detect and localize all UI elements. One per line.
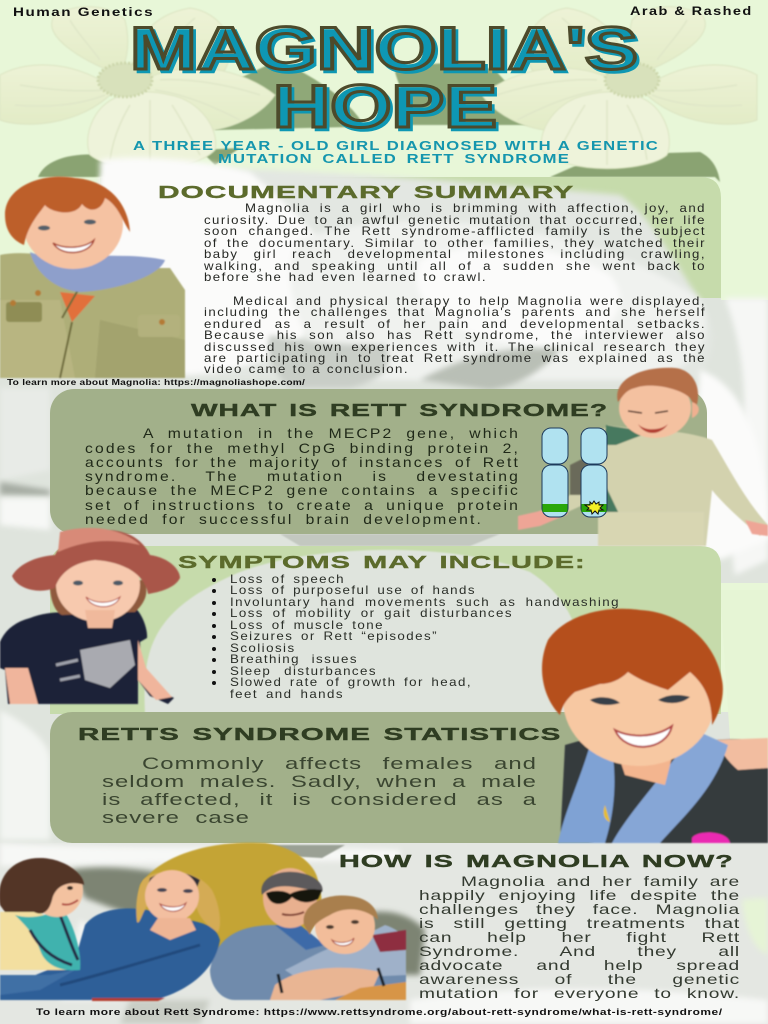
title: Magnolia's Hope: MAGNOLIA'S: [133, 18, 641, 85]
list: symptoms: Loss of purposeful use of hands: [230, 584, 476, 597]
list: symptoms: feet and hands: [230, 688, 344, 701]
panel: documentary summary background: [100, 177, 721, 300]
list: symptoms: Involuntary hand movements such as handwashing: [230, 596, 620, 609]
title: Magnolia's Hope: MAGNOLIA'S: [130, 15, 638, 82]
text: documentary summary: Medical and physical therapy to help Magnolia were displayed,: [233, 294, 706, 308]
text: what is Rett syndrome: set of instructions to create a unique protein: [85, 497, 520, 513]
subtitle: MUTATION CALLED RETT SYNDROME: [218, 152, 570, 166]
text: documentary summary: endured as a result of her pain and developmental setbacks.: [204, 317, 706, 331]
list: symptoms: [212, 573, 620, 701]
text: documentary summary: of the documentary. Similar to other families, they watched their: [204, 236, 706, 250]
list: symptoms: Slowed rate of growth for head,: [230, 676, 472, 689]
text: what is Rett syndrome: because the MECP2 gene contains a specific: [85, 482, 520, 498]
text: documentary summary: walking, and speaking until all of a sudden she went back to: [204, 259, 706, 273]
text: statistics: seldom males. Sadly, when a male: [102, 773, 537, 791]
text: documentary summary: curiosity. Due to an awful genetic mutation that occurred, her life: [204, 213, 706, 227]
heading: statistics: RETTS SYNDROME STATISTICS: [78, 724, 561, 744]
photo: laughing girl in cream sweater: [518, 368, 768, 546]
subtitle: [133, 139, 659, 166]
photo: smiling child in green jacket: [0, 177, 185, 378]
panel: what is rett syndrome background: [50, 389, 707, 534]
text: how is Magnolia now: mutation for everyone to know.: [419, 985, 740, 1001]
text: documentary summary: Magnolia is a girl who is brimming with affection, joy, and: [245, 201, 706, 215]
text: documentary summary: including the challenges that Magnolia's parents and she herself: [204, 305, 706, 319]
text: how is Magnolia now: can help her fight Rett: [419, 929, 740, 945]
text: how is Magnolia now: awareness of the genetic: [419, 971, 740, 987]
text: how is Magnolia now: Magnolia and her family are: [461, 873, 740, 889]
yellow paint circle behind family: [139, 843, 322, 960]
text: statistics: is affected, it is considered as a: [102, 791, 537, 809]
text: what is Rett syndrome: codes for the methyl CpG binding protein 2,: [85, 440, 520, 456]
panel: symptoms background: [50, 546, 721, 714]
text: how is Magnolia now: is still getting treatments that: [419, 915, 740, 931]
subtitle: A THREE YEAR - OLD GIRL DIAGNOSED WITH A GENETIC: [133, 139, 659, 153]
photo: smiling red-haired child with blue scarf: [542, 609, 768, 843]
text: what is Rett syndrome: A mutation in the MECP2 gene, which: [143, 425, 520, 441]
text: documentary summary: baby girl reach developmental milestones including crawling,: [204, 247, 706, 261]
title: Magnolia's Hope: [130, 15, 641, 143]
list: symptoms: Loss of muscle tone: [230, 619, 384, 632]
text: documentary summary: Because his son also has Rett syndrome, the interviewer also: [204, 328, 706, 342]
link: learn more about Rett syndrome: To learn more about Rett Syndrome: https://www.rettsyndrome.org/about-rett-syndrome/what-is-rett-syndrome/: [36, 1007, 723, 1018]
heading: how is Magnolia now: HOW IS MAGNOLIA NOW?: [339, 851, 734, 871]
header: authors: Arab & Rashed: [630, 6, 753, 18]
leaves behind flowers: [38, 60, 720, 182]
text: documentary summary: are participating in to treat Rett syndrome was explained as the: [204, 351, 706, 365]
text: how is Magnolia now: happily enjoying life despite the: [419, 887, 740, 903]
list: symptoms: Breathing issues: [230, 653, 358, 666]
marble overlay on symptoms panel: [145, 550, 582, 714]
text: statistics: Commonly affects females and: [142, 755, 537, 773]
text: what is Rett syndrome: [85, 425, 520, 527]
heading: what is Rett syndrome: WHAT IS RETT SYNDROME?: [191, 400, 608, 420]
text: documentary summary: [204, 201, 706, 376]
list: symptoms: Loss of mobility or gait disturbances: [230, 607, 513, 620]
text: how is Magnolia now: [419, 873, 740, 1001]
text: statistics: severe case: [102, 809, 250, 827]
text: how is Magnolia now: challenges they face. Magnolia: [419, 901, 740, 917]
text: documentary summary: video came to a conclusion.: [204, 362, 409, 376]
text: what is Rett syndrome: needed for successful brain development.: [85, 511, 483, 527]
header: course label: Human Genetics: [13, 7, 154, 19]
list: symptoms: Sleep disturbances: [230, 665, 377, 678]
list: symptoms: Scoliosis: [230, 642, 296, 655]
heading: documentary summary: DOCUMENTARY SUMMARY: [158, 182, 574, 202]
photo: girl in bucket hat: [0, 528, 180, 704]
flower: right magnolia: [482, 7, 757, 169]
heading: symptoms: SYMPTOMS MAY INCLUDE:: [178, 552, 586, 572]
text: how is Magnolia now: advocate and help spread: [419, 957, 740, 973]
panel: statistics background: [50, 712, 610, 843]
photo: Magnolia's family: [0, 858, 406, 1001]
text: statistics: [102, 755, 537, 827]
text: documentary summary: soon changed. The Rett syndrome-afflicted family is the subject: [204, 224, 706, 238]
text: what is Rett syndrome: syndrome. The mutation is devestating: [85, 468, 520, 484]
text: how is Magnolia now: Syndrome. And they all: [419, 943, 740, 959]
text: documentary summary: before she had even learned to crawl.: [204, 270, 487, 284]
text: what is Rett syndrome: accounts for the majority of instances of Rett: [85, 454, 520, 470]
list: symptoms: Loss of speech: [230, 573, 345, 586]
flower: left magnolia: [0, 7, 275, 169]
list: symptoms: Seizures or Rett “episodes”: [230, 630, 438, 643]
link: learn more about Magnolia: To learn more about Magnolia: https://magnoliashope.com/: [7, 377, 305, 387]
text: documentary summary: discussed his own experiences with it. The clinical research they: [204, 340, 706, 354]
title: Magnolia's Hope: HOPE: [273, 73, 497, 140]
icon: chromosome pair: [542, 428, 607, 517]
title: Magnolia's Hope: HOPE: [276, 76, 500, 143]
